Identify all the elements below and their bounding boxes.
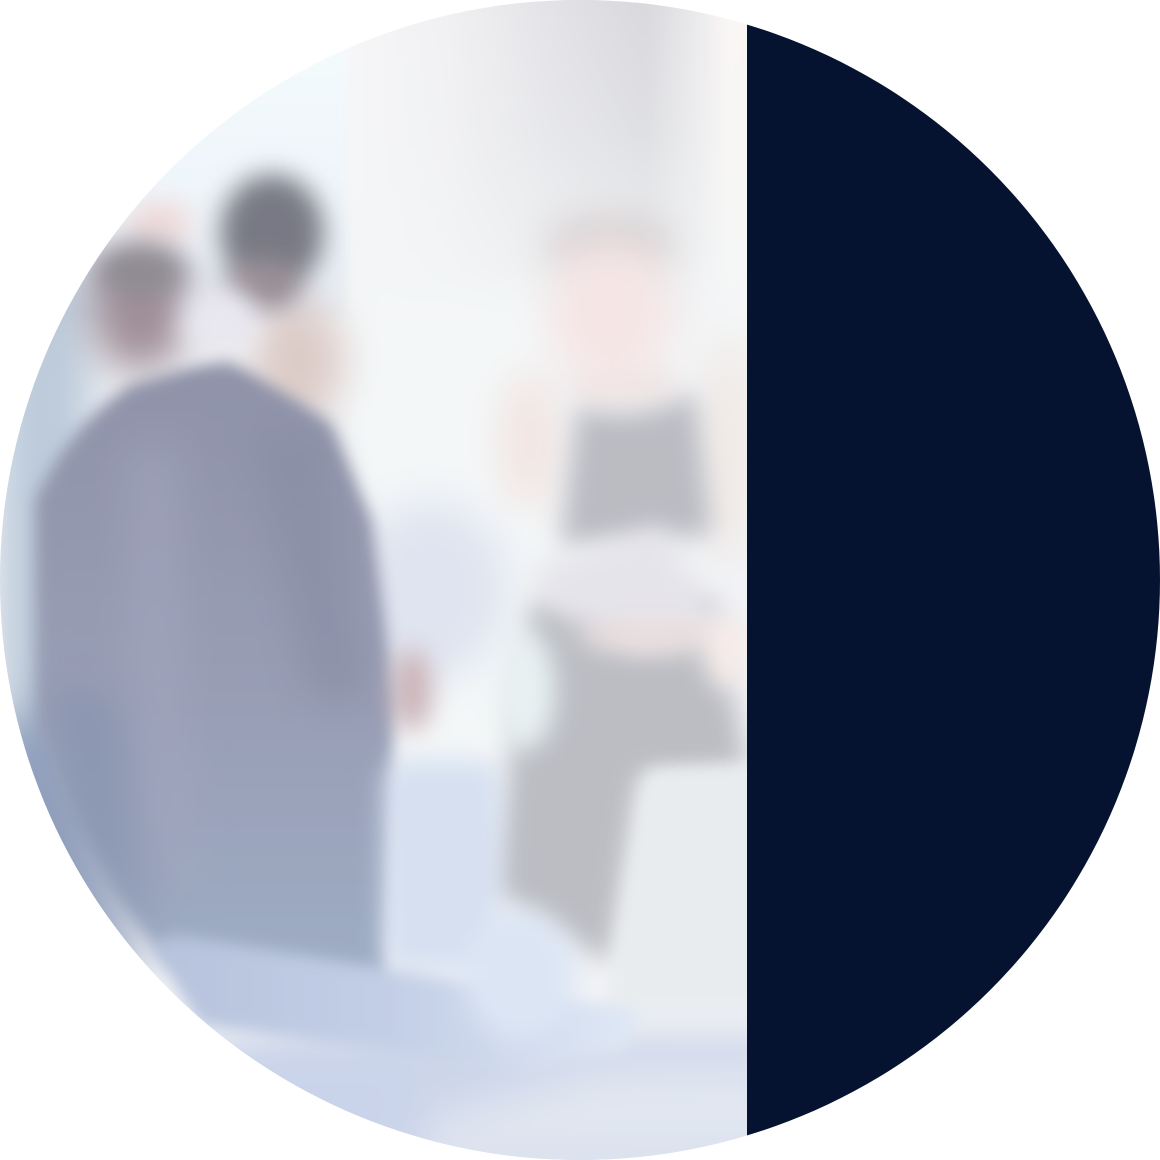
men: neck [224, 259, 300, 311]
pink accent behind heads [128, 200, 192, 244]
woman: head shadow [545, 219, 675, 271]
pillar [504, 38, 699, 217]
woman: right arm [707, 358, 747, 544]
navy panel [747, 0, 1160, 1160]
men: front head [220, 174, 324, 290]
hand [392, 648, 432, 732]
woman: neck [591, 374, 670, 404]
blurred photo [0, 0, 800, 1160]
woman: skirt [492, 600, 748, 965]
woman: dress top [560, 392, 712, 545]
table [154, 932, 628, 1054]
woman: head [550, 230, 668, 362]
woman: papers [540, 520, 712, 634]
men: suit light stripe [125, 440, 190, 900]
men: second man's face [252, 298, 344, 422]
men: collar [182, 288, 258, 356]
laptop [643, 760, 740, 784]
men: suit [35, 358, 395, 985]
men: suit dark fold [304, 564, 350, 682]
white cup [385, 760, 500, 970]
background window [320, 271, 337, 296]
men: suit lower-left shade [58, 702, 142, 937]
men: back head [90, 248, 190, 372]
bottom surface [218, 1032, 747, 1140]
centre pale blue shapes [375, 500, 512, 677]
